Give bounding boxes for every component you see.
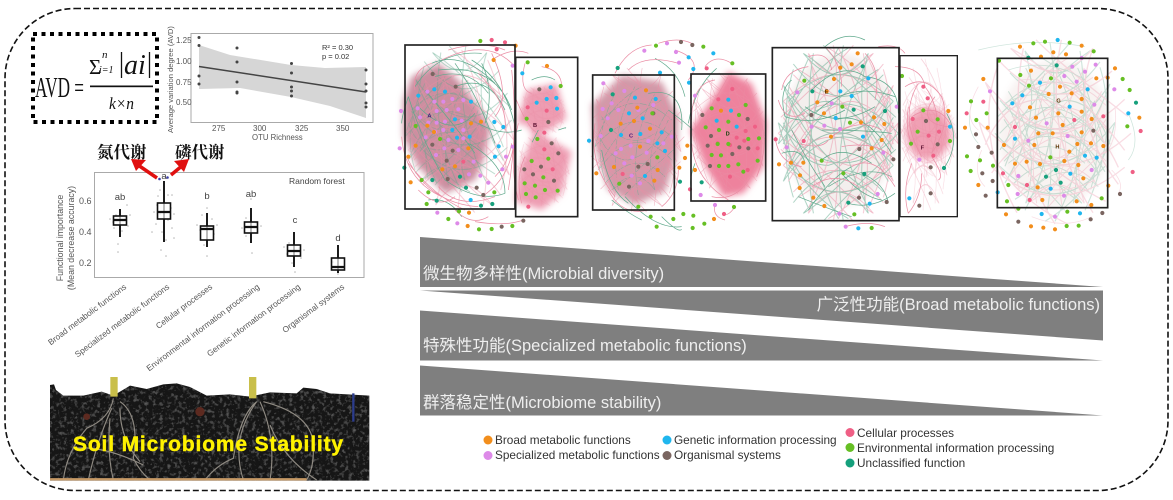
wedge: broad metabolic functions <box>420 290 1103 340</box>
label: phosphorus metabolism: 磷代谢 <box>175 142 225 162</box>
scatter plot: AVD vs OTU richness: OTU Richness <box>252 133 303 142</box>
legend: Unclassified function <box>857 456 965 470</box>
module hairball F <box>906 107 951 160</box>
scatter plot: AVD vs OTU richness: 275 <box>212 124 226 133</box>
box plot: functional importance: Broad metabolic functions <box>46 282 128 347</box>
box plot: functional importance: c <box>293 215 298 226</box>
mesh of links in A and B <box>405 46 569 212</box>
legend: Specialized metabolic functions <box>495 448 660 462</box>
AVD formula panel: Σ <box>89 55 101 79</box>
nodes C and D <box>589 42 759 228</box>
AVD formula panel <box>33 34 157 122</box>
wedge: microbiome stability <box>420 366 1103 416</box>
legend: Environmental information processing <box>857 441 1054 455</box>
mesh of links in E and F <box>778 45 956 221</box>
box plot: functional importance: 0.6 <box>79 196 92 206</box>
box plot: functional importance: b <box>204 191 210 202</box>
scatter plot: AVD vs OTU richness: 0.75 <box>176 78 192 87</box>
scatter plot: AVD vs OTU richness: 1.25 <box>176 36 192 45</box>
scatter plot: AVD vs OTU richness <box>166 26 373 142</box>
arrow: to nitrogen metabolism <box>131 159 157 178</box>
AVD formula panel: n <box>102 49 108 61</box>
wedge: broad metabolic functions: 广泛性功能(Broad metabolic functions) <box>817 295 1100 314</box>
box plot: functional importance: Genetic information processing <box>205 281 303 358</box>
wedge: specialized metabolic functions: 特殊性功能(Specialized metabolic functions) <box>423 336 747 355</box>
AVD formula panel: AVD = <box>35 72 84 104</box>
box plot: functional importance <box>46 171 364 373</box>
box plot: functional importance: 0.2 <box>79 258 92 268</box>
box plot: functional importance: Organismal systems <box>280 282 346 335</box>
module hairball B <box>515 83 572 210</box>
network panel: modules E and F: E <box>825 89 829 95</box>
network panel: modules E and F <box>772 36 957 228</box>
wash under module E <box>783 53 897 207</box>
network panel: modules C and D: C <box>629 134 633 140</box>
box plot: functional importance: Functional importance <box>55 195 65 281</box>
network panel: modules A and B <box>400 40 578 229</box>
network panel: modules G and H: G <box>1056 99 1061 105</box>
scatter plot: AVD vs OTU richness: R² = 0.30 <box>322 43 353 52</box>
network panel: modules A and B: B <box>533 123 537 129</box>
network panel: modules G and H <box>965 40 1141 229</box>
nodes G and H <box>965 40 1141 229</box>
box plot: functional importance: Random forest <box>289 176 345 186</box>
legend: Genetic information processing <box>674 433 837 447</box>
AVD formula panel: ai <box>124 50 146 81</box>
nodes A and B <box>400 40 561 229</box>
module hairball D <box>690 72 767 197</box>
jittered sample points <box>110 185 342 274</box>
module hairball C <box>592 75 678 205</box>
wedge: microbial diversity: 微生物多样性(Microbial diversity) <box>423 264 664 283</box>
legend: Broad metabolic functions <box>495 433 631 447</box>
box plot: functional importance: (Mean decrease accuracy) <box>66 186 76 290</box>
network panel: modules C and D: D <box>726 131 730 137</box>
nodes E and F <box>776 53 950 228</box>
AVD formula panel: k×n <box>109 94 134 113</box>
soil photo with roots <box>50 377 369 481</box>
wedge: microbial diversity <box>420 237 1103 287</box>
plant stems <box>114 377 253 398</box>
soil title: Soil Microbiome Stability <box>73 433 344 456</box>
scatter plot: AVD vs OTU richness: p = 0.02 <box>322 52 349 61</box>
box plot: functional importance: a <box>161 171 167 182</box>
mesh of links in C and D <box>589 68 766 212</box>
wash under modules G and H <box>998 60 1112 207</box>
network panel: modules E and F: F <box>921 145 925 151</box>
legend: Organismal systems <box>674 448 781 462</box>
scatter plot: AVD vs OTU richness: 350 <box>336 124 350 133</box>
box plot: functional importance: ab <box>246 189 256 200</box>
box plot: functional importance: Specialized metabolic functions <box>73 282 171 359</box>
scatter plot: AVD vs OTU richness: 300 <box>253 124 267 133</box>
box plot: functional importance: Cellular processes <box>154 282 214 331</box>
box plot: functional importance: 0.4 <box>79 227 92 237</box>
wedge: microbiome stability: 群落稳定性(Microbiome stability) <box>423 393 661 412</box>
wedge: specialized metabolic functions <box>420 310 1103 360</box>
box plot: functional importance: d <box>335 233 341 244</box>
scatter plot: AVD vs OTU richness: 1.00 <box>176 57 192 66</box>
scatter plot: AVD vs OTU richness: 325 <box>295 124 309 133</box>
box plot: functional importance: Environmental information processing <box>144 281 262 373</box>
module hairball A <box>403 63 490 193</box>
network panel: modules G and H: H <box>1055 145 1059 151</box>
network panel: modules A and B: A <box>427 114 431 120</box>
AVD formula panel: i=1 <box>99 65 114 76</box>
label: nitrogen metabolism: 氮代谢 <box>97 143 147 162</box>
plant roots <box>63 398 317 480</box>
arrow: to phosphorus metabolism <box>171 159 189 175</box>
network panel: modules C and D <box>589 40 767 230</box>
scatter plot: AVD vs OTU richness: 0.50 <box>176 98 192 107</box>
legend <box>484 426 1054 470</box>
legend: Cellular processes <box>857 426 954 440</box>
scatter plot: AVD vs OTU richness: Average variation degree (AVD) <box>166 26 175 133</box>
box plot: functional importance: ab <box>115 192 125 203</box>
